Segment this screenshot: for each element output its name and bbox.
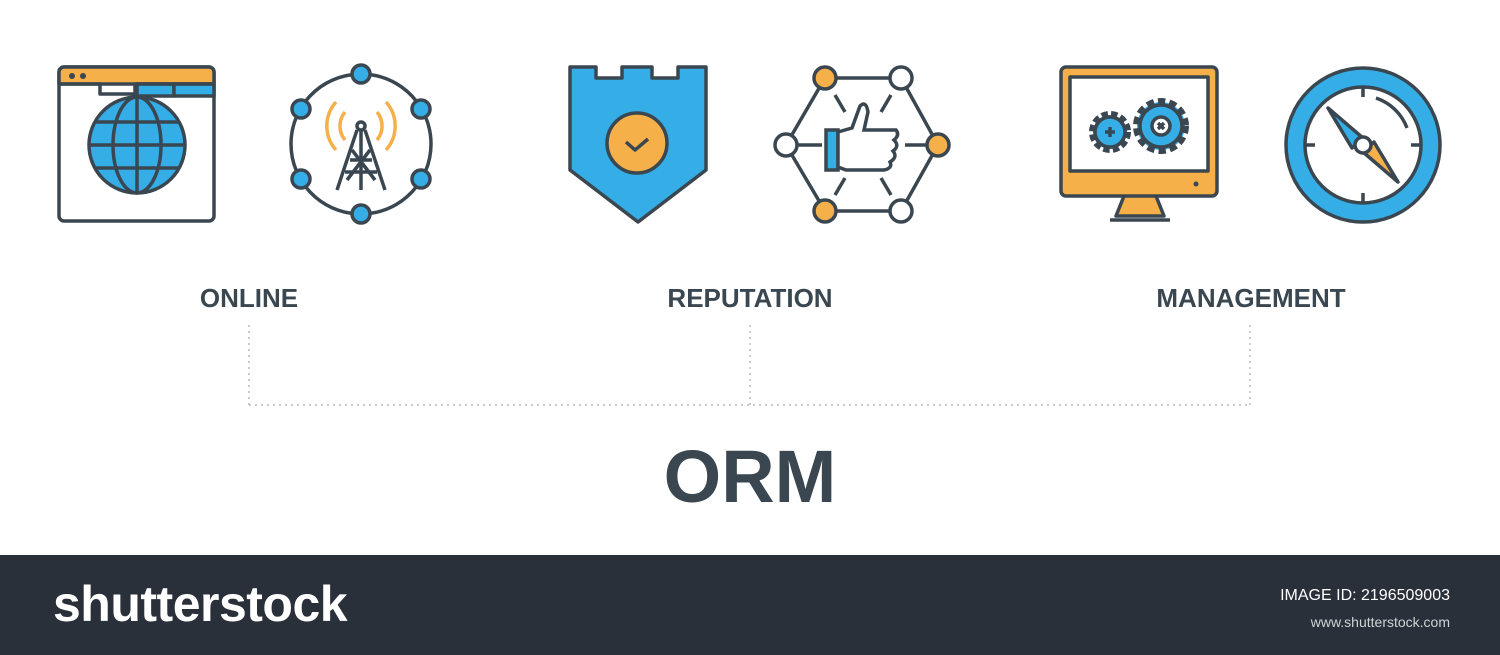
heading: REPUTATION: REPUTATION	[667, 283, 833, 313]
footer bar	[0, 555, 1500, 655]
icon: network thumbs up	[775, 67, 949, 222]
footer image id: IMAGE ID: 2196509003	[1280, 587, 1450, 604]
icon: shield with check	[570, 67, 706, 222]
footer logo: shutterstock	[53, 576, 348, 632]
heading: ONLINE: ONLINE	[200, 283, 298, 313]
icon: compass	[1286, 68, 1440, 222]
icon: antenna tower	[291, 65, 431, 223]
footer url: www.shutterstock.com	[1310, 614, 1450, 630]
icon: browser with globe	[59, 67, 214, 221]
heading: MANAGEMENT: MANAGEMENT	[1156, 283, 1346, 313]
title: ORM: ORM	[664, 435, 836, 518]
icon: monitor with gears	[1061, 67, 1217, 220]
